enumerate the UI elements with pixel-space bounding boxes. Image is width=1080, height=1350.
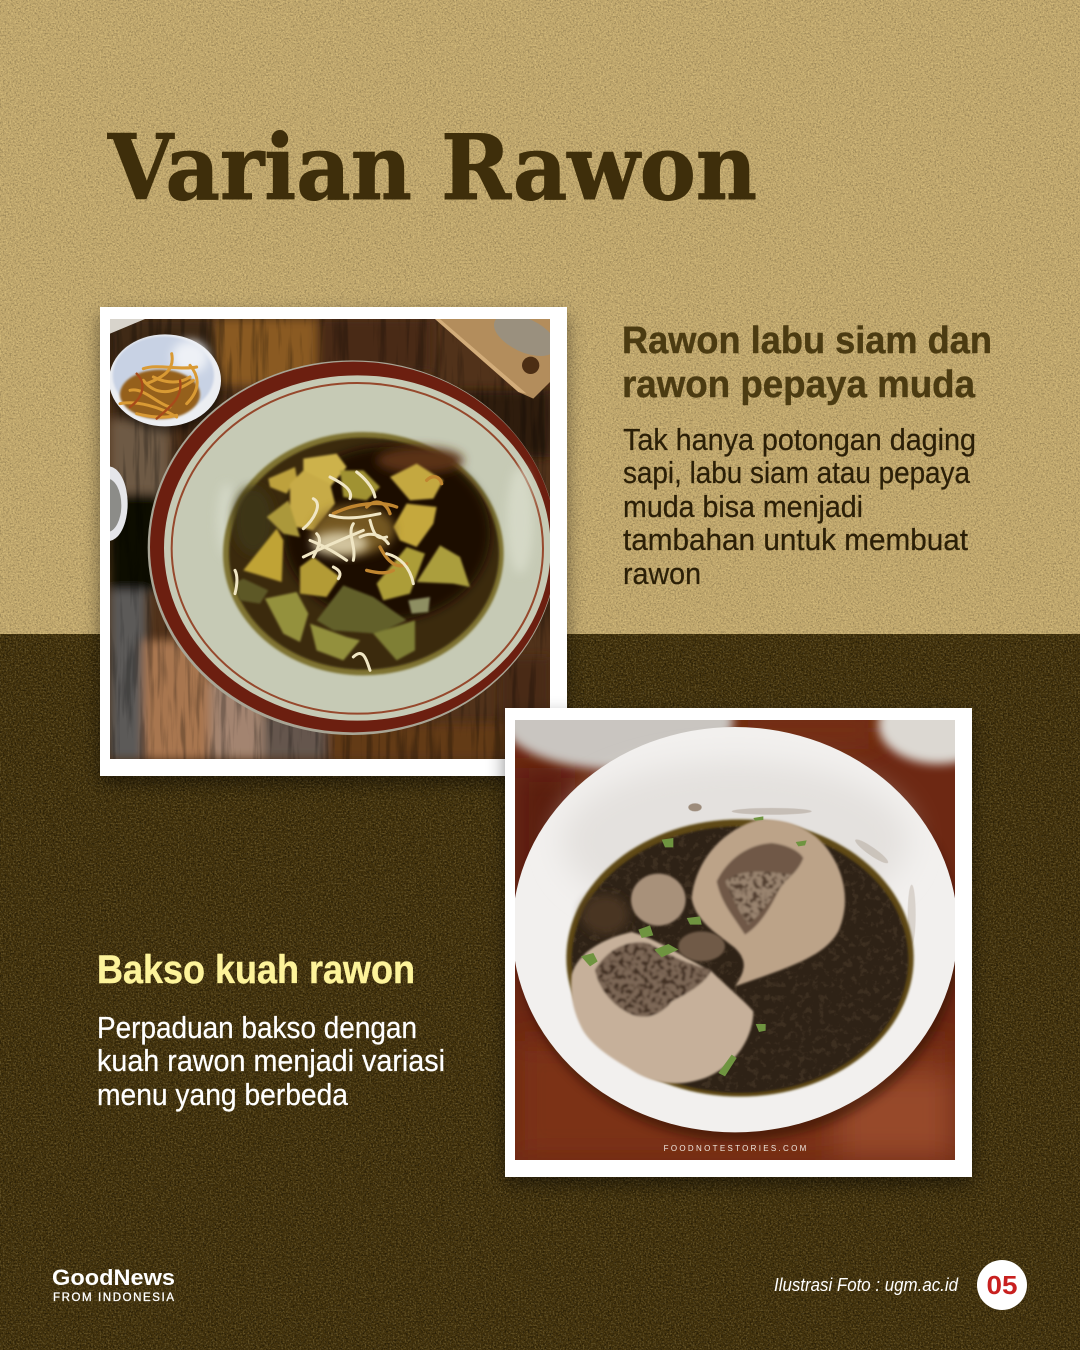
heading: rawon pepaya muda (622, 364, 976, 406)
soup (566, 819, 914, 1097)
soup (223, 432, 504, 675)
title: Varian Rawon (107, 115, 757, 221)
watermark: FOODNOTESTORIES.COM (664, 1144, 806, 1153)
background: tan upper section (0, 0, 1080, 634)
bowl interior shading (540, 756, 930, 884)
body text: menu yang berbeda (97, 1077, 349, 1112)
vegetable pieces (233, 454, 470, 660)
logo: GoodNews from Indonesia: FROM INDONESIA (53, 1292, 174, 1304)
logo: GoodNews from Indonesia (52, 1265, 175, 1304)
plate stripe (172, 383, 543, 714)
heading (622, 320, 992, 406)
photo: bowl of meatballs in black soup (515, 720, 955, 1160)
body text (97, 1010, 445, 1112)
photo: plate of rawon with chayote (89, 306, 562, 759)
page number badge: 05 (986, 1270, 1018, 1300)
plate body (164, 375, 551, 721)
plate highlight (507, 467, 533, 574)
green herbs (581, 816, 807, 1076)
bowl shadow (515, 836, 955, 1146)
body text: tambahan untuk membuat (623, 522, 968, 557)
body text: muda bisa menjadi (623, 489, 863, 524)
soup texture (565, 818, 915, 1098)
napkin corner (110, 319, 145, 334)
small bowl of fried shallots (109, 334, 224, 432)
soup stain ring (688, 803, 916, 945)
sprouts and fried shallots garnish (235, 472, 442, 670)
heading: Rawon labu siam dan (622, 320, 992, 362)
background: dark brown lower section (0, 634, 1080, 1350)
background bowls (515, 720, 955, 776)
body text: kuah rawon menjadi variasi (97, 1043, 445, 1078)
photo credit: Ilustrasi Foto : ugm.ac.id (774, 1275, 959, 1295)
plate rim (148, 360, 557, 735)
body text (623, 422, 976, 591)
second bowl edge (110, 466, 128, 541)
lower meatball half (571, 932, 753, 1083)
wooden board (435, 319, 550, 399)
body text: Tak hanya potongan daging (623, 422, 976, 457)
body text: Perpaduan bakso dengan (97, 1010, 417, 1045)
text block: bakso kuah rawon (97, 948, 445, 1112)
upper meatball half (692, 820, 845, 986)
logo: GoodNews from Indonesia: GoodNews (52, 1265, 175, 1290)
small meatball (631, 874, 686, 926)
white photo frame (100, 307, 567, 776)
body text: rawon (623, 556, 701, 591)
photo card: bakso kuah rawon (503, 673, 998, 1177)
main bowl (512, 727, 958, 1132)
white photo frame (505, 708, 972, 1177)
body text: sapi, labu siam atau pepaya (623, 455, 971, 490)
heading: Bakso kuah rawon (97, 948, 415, 992)
photo card: rawon labu siam (89, 306, 567, 776)
page number badge (977, 1260, 1027, 1310)
central meat crumbs (678, 931, 725, 961)
text block: rawon labu siam (622, 320, 992, 591)
